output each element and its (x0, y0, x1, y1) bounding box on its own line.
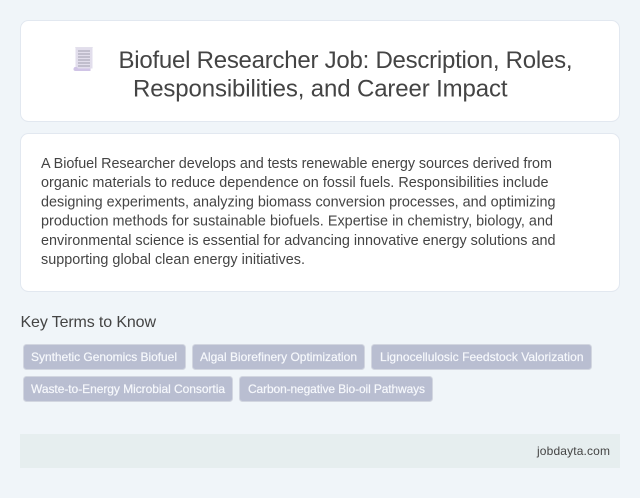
chip: Lignocellulosic Feedstock Valorization (372, 344, 592, 370)
chip: Algal Biorefinery Optimization (192, 344, 364, 370)
chip: Lignocellulosic Feedstock Valorization: Lignocellulosic Feedstock Valorization (380, 350, 584, 364)
description text (41, 156, 556, 268)
description text: supporting global clean energy initiatives. (41, 252, 305, 268)
footer bar (20, 434, 620, 468)
chip: Algal Biorefinery Optimization: Algal Biorefinery Optimization (200, 350, 357, 364)
key term chips (24, 344, 592, 402)
title text (118, 47, 572, 102)
chip: Synthetic Genomics Biofuel: Synthetic Genomics Biofuel (31, 350, 177, 364)
chip: Carbon-negative Bio-oil Pathways (240, 376, 432, 402)
description text: A Biofuel Researcher develops and tests renewable energy sources derived from (41, 156, 552, 172)
description text: production methods for sustainable biofuels. Expertise in chemistry, biology, and (41, 214, 553, 230)
icon: document scroll (74, 48, 92, 71)
panel: description card (20, 134, 620, 292)
description text: organic materials to reduce dependence on fossil fuels. Responsibilities include (41, 175, 548, 191)
title text: Biofuel Researcher Job: Description, Roles, (118, 47, 572, 74)
chip: Waste-to-Energy Microbial Consortia: Waste-to-Energy Microbial Consortia (31, 382, 225, 396)
chip: Synthetic Genomics Biofuel (24, 344, 186, 370)
footer bar: jobdayta.com (536, 444, 610, 458)
description text: environmental science is essential for advancing innovative energy solutions and (41, 233, 556, 249)
chip: Waste-to-Energy Microbial Consortia (24, 376, 232, 402)
heading: key terms: Key Terms to Know (20, 314, 156, 331)
description text: designing experiments, analyzing biomass conversion processes, and optimizing (41, 194, 556, 210)
panel: title card (20, 20, 620, 122)
chip: Carbon-negative Bio-oil Pathways: Carbon-negative Bio-oil Pathways (248, 382, 425, 396)
title text: Responsibilities, and Career Impact (133, 76, 508, 102)
